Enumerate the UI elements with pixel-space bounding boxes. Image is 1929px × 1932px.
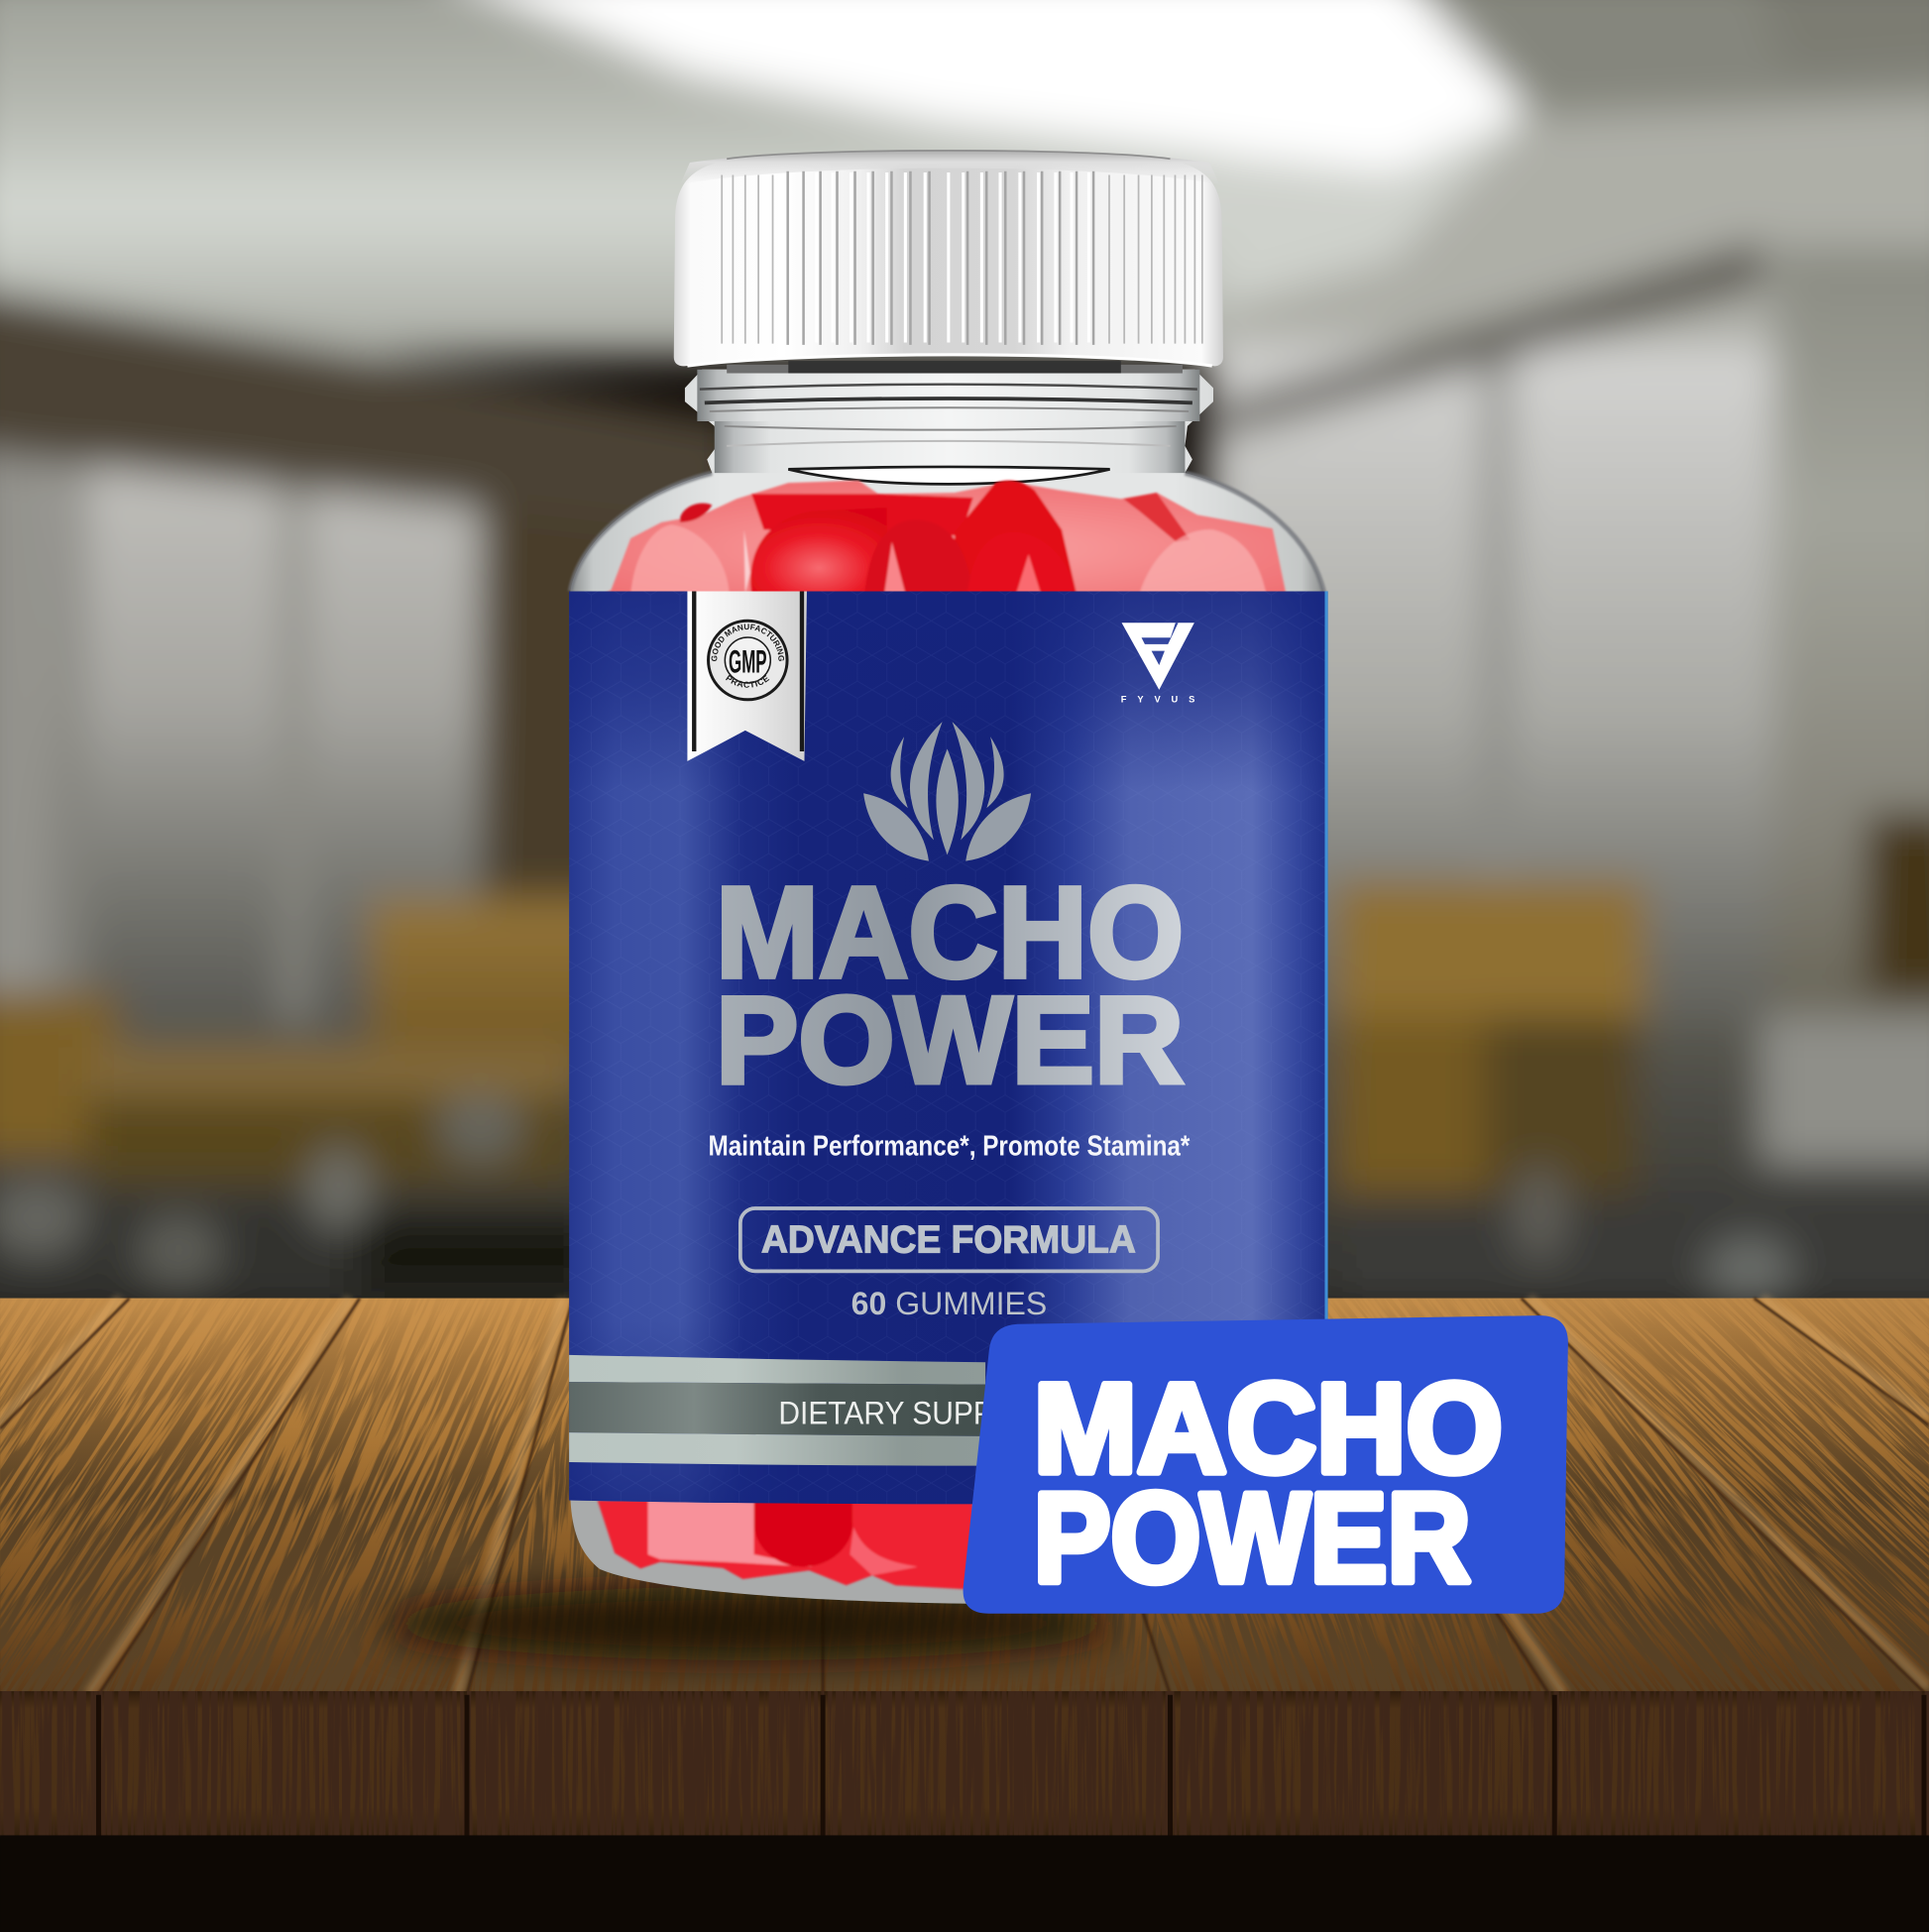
top gummies (604, 481, 1286, 594)
floor (0, 1022, 1929, 1318)
supplement stripes (569, 1355, 1113, 1466)
neck threads (697, 361, 1199, 484)
blue label (569, 591, 1328, 1505)
bottle (567, 150, 1328, 1604)
sticker: product name: POWER (1034, 1467, 1471, 1609)
right beam (1213, 240, 1767, 438)
GMP seal: PRACTICE (726, 674, 769, 688)
armchairs and table (370, 899, 616, 1072)
blurred interior background (0, 0, 1929, 1318)
GMP ribbon badge (687, 591, 807, 761)
glass outline (570, 473, 1324, 594)
wood grain planks (0, 1299, 1929, 1705)
bottom gummies (598, 1500, 973, 1589)
sticker: product name (964, 1315, 1568, 1614)
white ribbed cap (674, 150, 1223, 366)
advance formula badge: ADVANCE FORMULA (761, 1219, 1136, 1262)
glass base (570, 1497, 973, 1604)
left beam (0, 285, 739, 537)
plank seams (0, 1299, 1929, 1695)
supplement stripes: DIETARY SUPPLEMENT (778, 1395, 1113, 1430)
GMP seal: GMP (729, 643, 767, 679)
wooden table top (0, 1299, 1929, 1705)
glass jar (570, 361, 1324, 1604)
advance formula badge (740, 1208, 1158, 1271)
cap ribs (788, 171, 1093, 345)
GMP seal: GOOD MANUFACTURING (712, 624, 784, 661)
plank seam highlights (0, 1299, 1929, 1695)
count: 60 GUMMIES (851, 1286, 1047, 1321)
product name on label: POWER (716, 972, 1184, 1109)
sticker: product name: MACHO (1034, 1358, 1503, 1500)
right window wall (1207, 345, 1786, 1083)
bright ceiling panel (425, 0, 1528, 172)
top surface light falloff (0, 1299, 1929, 1695)
product name on label (716, 859, 1184, 1109)
bottle shadow on table (382, 1586, 1121, 1660)
GMP seal (707, 619, 789, 702)
table underside (0, 1835, 1929, 1932)
left window wall (0, 431, 542, 1035)
tagline: Maintain Performance*, Promote Stamina* (709, 1131, 1191, 1163)
FYVUS logo (1121, 623, 1194, 704)
FYVUS logo: FYVUS (1121, 694, 1194, 704)
lotus emblem (863, 722, 1031, 861)
front wood grain (0, 1691, 1929, 1837)
table front edge (0, 1691, 1929, 1837)
product name on label: MACHO (716, 859, 1184, 1004)
